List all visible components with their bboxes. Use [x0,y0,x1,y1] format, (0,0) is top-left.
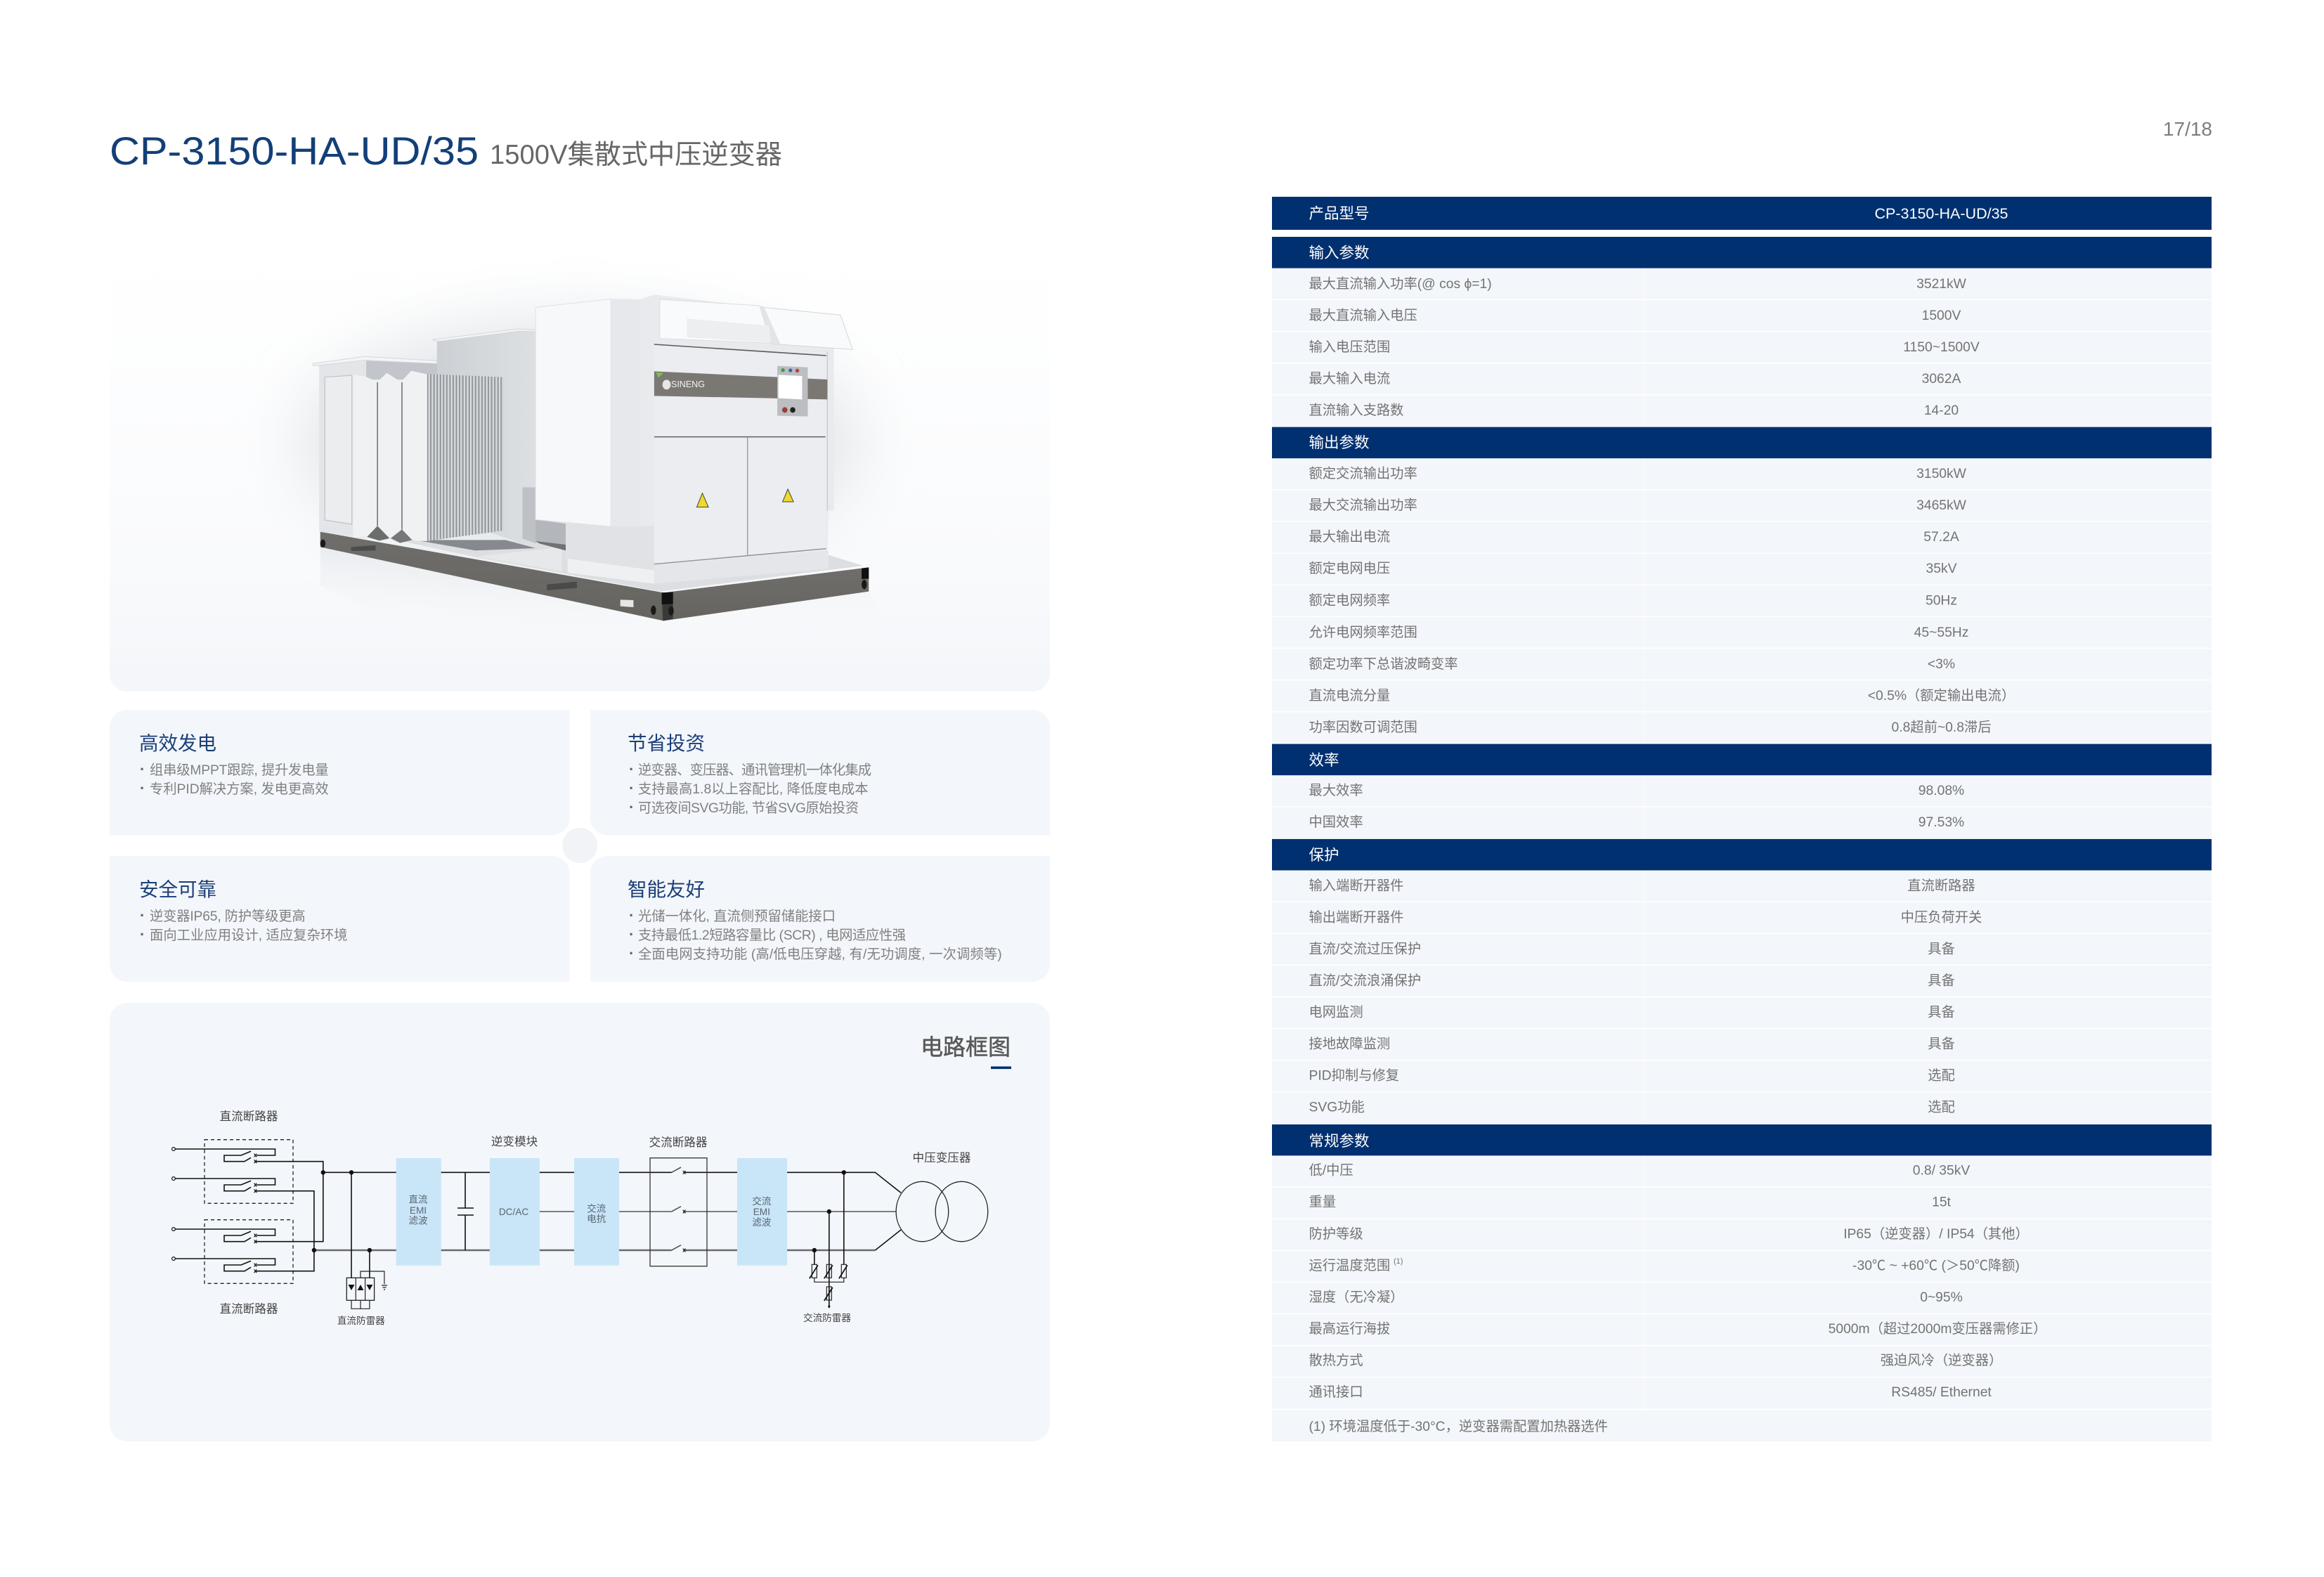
row: 直流/交流过压保护 [1309,942,1421,957]
row: 通讯接口 [1309,1384,1363,1400]
heading: circuit diagram: 电路框图 [921,1034,1011,1060]
card: 高效发电: 组串级MPPT跟踪, 提升发电量 [150,762,329,778]
row: 输入端断开器件 [1309,878,1403,894]
row [1272,1378,2212,1409]
row: 具备 [1928,1005,1955,1020]
section: 效率: 效率 [1309,752,1339,769]
card: 高效发电: · [140,760,145,778]
card: 高效发电: 专利PID解决方案, 发电更高效 [150,781,329,797]
row [1272,459,2212,489]
row [1272,1156,2212,1186]
doors [654,436,826,438]
card: 智能友好: · [629,945,634,962]
row: 防护等级 [1309,1226,1363,1242]
bus wires [312,1170,901,1252]
title [110,129,782,173]
row: 5000m（超过2000m变压器需修正） [1829,1321,2046,1337]
row: 35kV [1926,562,1957,576]
row: 散热方式 [1309,1353,1363,1368]
DC breakers [172,1110,323,1316]
card: 安全可靠 [110,856,569,982]
row: 直流/交流浪涌保护 [1309,973,1421,988]
row: IP65（逆变器）/ IP54（其他） [1843,1226,2029,1242]
row: 1150~1500V [1903,340,1980,355]
card: 高效发电: · [140,779,145,797]
section: 常规参数 [1272,1124,2212,1155]
blue blocks [396,1158,787,1266]
row: 3521kW [1916,277,1967,292]
connection area [522,487,536,543]
card: 节省投资: · [629,798,634,816]
card: 节省投资: 节省投资 [628,732,705,754]
card: 智能友好: 支持最低1.2短路容量比 (SCR) , 电网适应性强 [638,928,906,943]
card: 智能友好: · [629,907,634,924]
row [1272,713,2212,744]
row: 输入电压范围 [1309,339,1390,355]
row: 直流断路器 [1907,878,1975,894]
row: 1500V [1922,309,1961,323]
row: 15t [1932,1195,1952,1210]
AC breaker: 交流断路器 [649,1136,708,1149]
card: 安全可靠: · [140,926,145,943]
row: 45~55Hz [1914,625,1968,640]
row: 最大直流输入功率(@ cos ϕ=1) [1309,276,1492,292]
row [1272,1346,2212,1377]
row: 电网监测 [1309,1005,1363,1020]
row: 选配 [1928,1099,1955,1115]
row: <0.5%（额定输出电流） [1868,688,2015,703]
row [1272,617,2212,648]
footnote row [1272,1410,2212,1441]
card: 安全可靠: 安全可靠 [139,878,216,900]
card: 智能友好: 全面电网支持功能 (高/低电压穿越, 有/无功调度, 一次调频等) [638,947,1002,962]
row [1272,1283,2212,1313]
row: 97.53% [1919,815,1964,830]
footnote row: (1) 环境温度低于-30°C，逆变器需配置加热器选件 [1309,1419,1608,1434]
transformer: 中压变压器 [913,1151,971,1164]
row [1272,395,2212,426]
block labels: EMI [410,1205,427,1216]
row: 低/中压 [1309,1162,1353,1178]
row: 14-20 [1924,403,1959,418]
row [1272,871,2212,901]
row: 额定电网电压 [1309,561,1390,576]
section: 输出参数: 输出参数 [1309,434,1370,451]
row: 具备 [1928,942,1955,957]
row: 输出端断开器件 [1309,909,1403,925]
section: 输入参数 [1272,237,2212,268]
row: (1) [1394,1257,1403,1266]
block labels: 交流 [752,1195,772,1207]
card: 节省投资: 支持最高1.8以上容配比, 降低度电成本 [638,781,869,797]
row [1272,680,2212,711]
row: 最大直流输入电压 [1309,308,1417,323]
row [1272,807,2212,838]
row: PID抑制与修复 [1309,1068,1399,1084]
card: 节省投资: 逆变器、变压器、通讯管理机一体化集成 [638,762,871,778]
row [1272,902,2212,933]
block labels [408,1135,772,1228]
row: RS485/ Ethernet [1891,1385,1992,1400]
row: 3465kW [1916,498,1967,513]
block labels: EMI [753,1207,770,1217]
row: 直流输入支路数 [1309,403,1403,418]
table header: CP-3150-HA-UD/35 [1875,205,2008,222]
row: <3% [1928,657,1955,672]
table header: 产品型号 [1309,205,1370,222]
card: 智能友好: 光储一体化, 直流侧预留储能接口 [638,909,836,924]
AC surge arrester [803,1170,851,1323]
AC surge arrester: 交流防雷器 [803,1312,851,1323]
row: 具备 [1928,973,1955,988]
row: 重量 [1309,1195,1336,1210]
tall tank [437,330,536,548]
block labels: DC/AC [499,1207,528,1217]
row [1272,554,2212,584]
row: SVG功能 [1309,1099,1365,1115]
row [1272,522,2212,552]
card: 节省投资: 可选夜间SVG功能, 节省SVG原始投资 [638,800,859,816]
grey band [654,371,827,399]
row [1272,649,2212,680]
row: 直流电流分量 [1309,688,1390,703]
control panel [777,366,807,417]
card: 智能友好 [590,856,1050,982]
row: 最大输出电流 [1309,529,1390,545]
card: 节省投资: · [629,760,634,778]
card: 节省投资: · [629,779,634,797]
row [1272,363,2212,394]
row: 最大输入电流 [1309,371,1390,387]
row: 98.08% [1919,784,1964,798]
row: 选配 [1928,1068,1955,1084]
title: 1500V集散式中压逆变器 [490,140,782,170]
row: 0~95% [1920,1290,1963,1305]
row [1272,997,2212,1028]
transformer [896,1151,988,1242]
DC surge arrester [337,1172,387,1326]
row [1272,966,2212,997]
row [1272,491,2212,521]
row: 湿度（无冷凝） [1309,1290,1403,1305]
row: 最大效率 [1309,783,1363,798]
row [1272,1219,2212,1250]
radiator [427,374,504,541]
block labels: 电抗 [587,1214,606,1224]
row: 强迫风冷（逆变器） [1881,1353,2002,1368]
left cabinet [319,361,366,539]
row: 接地故障监测 [1309,1036,1390,1051]
row [1272,1029,2212,1060]
row: 额定功率下总谐波畸变率 [1309,656,1458,672]
table: specifications [1272,197,2212,1441]
row [1272,585,2212,616]
row: 最大交流输出功率 [1309,498,1417,513]
row [1272,1093,2212,1124]
row: 运行温度范围 [1309,1258,1390,1273]
background halo [299,316,861,569]
row [1272,1314,2212,1345]
row: 额定电网频率 [1309,593,1390,609]
section: 输出参数 [1272,427,2212,458]
row: 允许电网频率范围 [1309,625,1417,640]
section: 效率 [1272,744,2212,775]
row: 0.8超前~0.8滞后 [1892,720,1992,735]
row: 具备 [1928,1036,1955,1051]
row [1272,268,2212,299]
page number: 17/18 [2163,118,2212,140]
row: 50Hz [1926,593,1957,609]
row [1272,1061,2212,1091]
panel: circuit block diagram [110,1003,1050,1441]
row [1272,300,2212,331]
section: 输入参数: 输入参数 [1309,245,1370,261]
row: 57.2A [1923,530,1959,545]
card: 高效发电 [110,710,569,835]
row: 最高运行海拔 [1309,1321,1390,1337]
row [1272,776,2212,806]
row: 3150kW [1916,467,1967,481]
center circle [562,828,597,863]
big side panel [535,299,611,526]
card: 安全可靠: 面向工业应用设计, 适应复杂环境 [150,928,347,943]
image: inverter machine [313,294,890,632]
block labels: 逆变模块 [491,1135,538,1148]
row: 中国效率 [1309,815,1363,830]
section: 保护: 保护 [1309,847,1339,864]
machine logo text: SINENG [671,379,705,389]
row [1272,1251,2212,1282]
panel: product image [110,249,1050,692]
card: 安全可靠: 逆变器IP65, 防护等级更高 [150,909,306,924]
card: 节省投资 [590,710,1050,835]
row: -30℃ ~ +60℃ (＞50℃降额) [1852,1258,2020,1273]
row: 3062A [1922,372,1961,387]
row: 额定交流输出功率 [1309,466,1417,481]
row [1272,1188,2212,1218]
panel: feature cards [110,710,1050,982]
base fittings [662,592,673,621]
inverter front [640,294,833,584]
hood [660,299,771,343]
DC breakers: 直流断路器 [220,1302,278,1316]
DC surge arrester: 直流防雷器 [337,1316,385,1326]
row: 中压负荷开关 [1901,909,1982,925]
card: 安全可靠: · [140,907,145,924]
block labels: 滤波 [752,1217,772,1228]
title: CP-3150-HA-UD/35 [110,129,479,173]
card: 智能友好: 智能友好 [628,878,705,900]
card: 高效发电: 高效发电 [139,732,216,754]
card: 智能友好: · [629,926,634,943]
row: 功率因数可调范围 [1309,720,1417,735]
table header [1272,197,2212,230]
block labels: 直流 [408,1195,428,1205]
block labels: 滤波 [408,1216,428,1226]
row [1272,934,2212,965]
section: 常规参数: 常规参数 [1309,1133,1370,1150]
section: 保护 [1272,839,2212,870]
DC breakers: 直流断路器 [220,1110,278,1123]
row [1272,332,2212,363]
block labels: 交流 [587,1203,606,1214]
row: 0.8/ 35kV [1913,1164,1970,1178]
AC breaker [649,1136,708,1266]
